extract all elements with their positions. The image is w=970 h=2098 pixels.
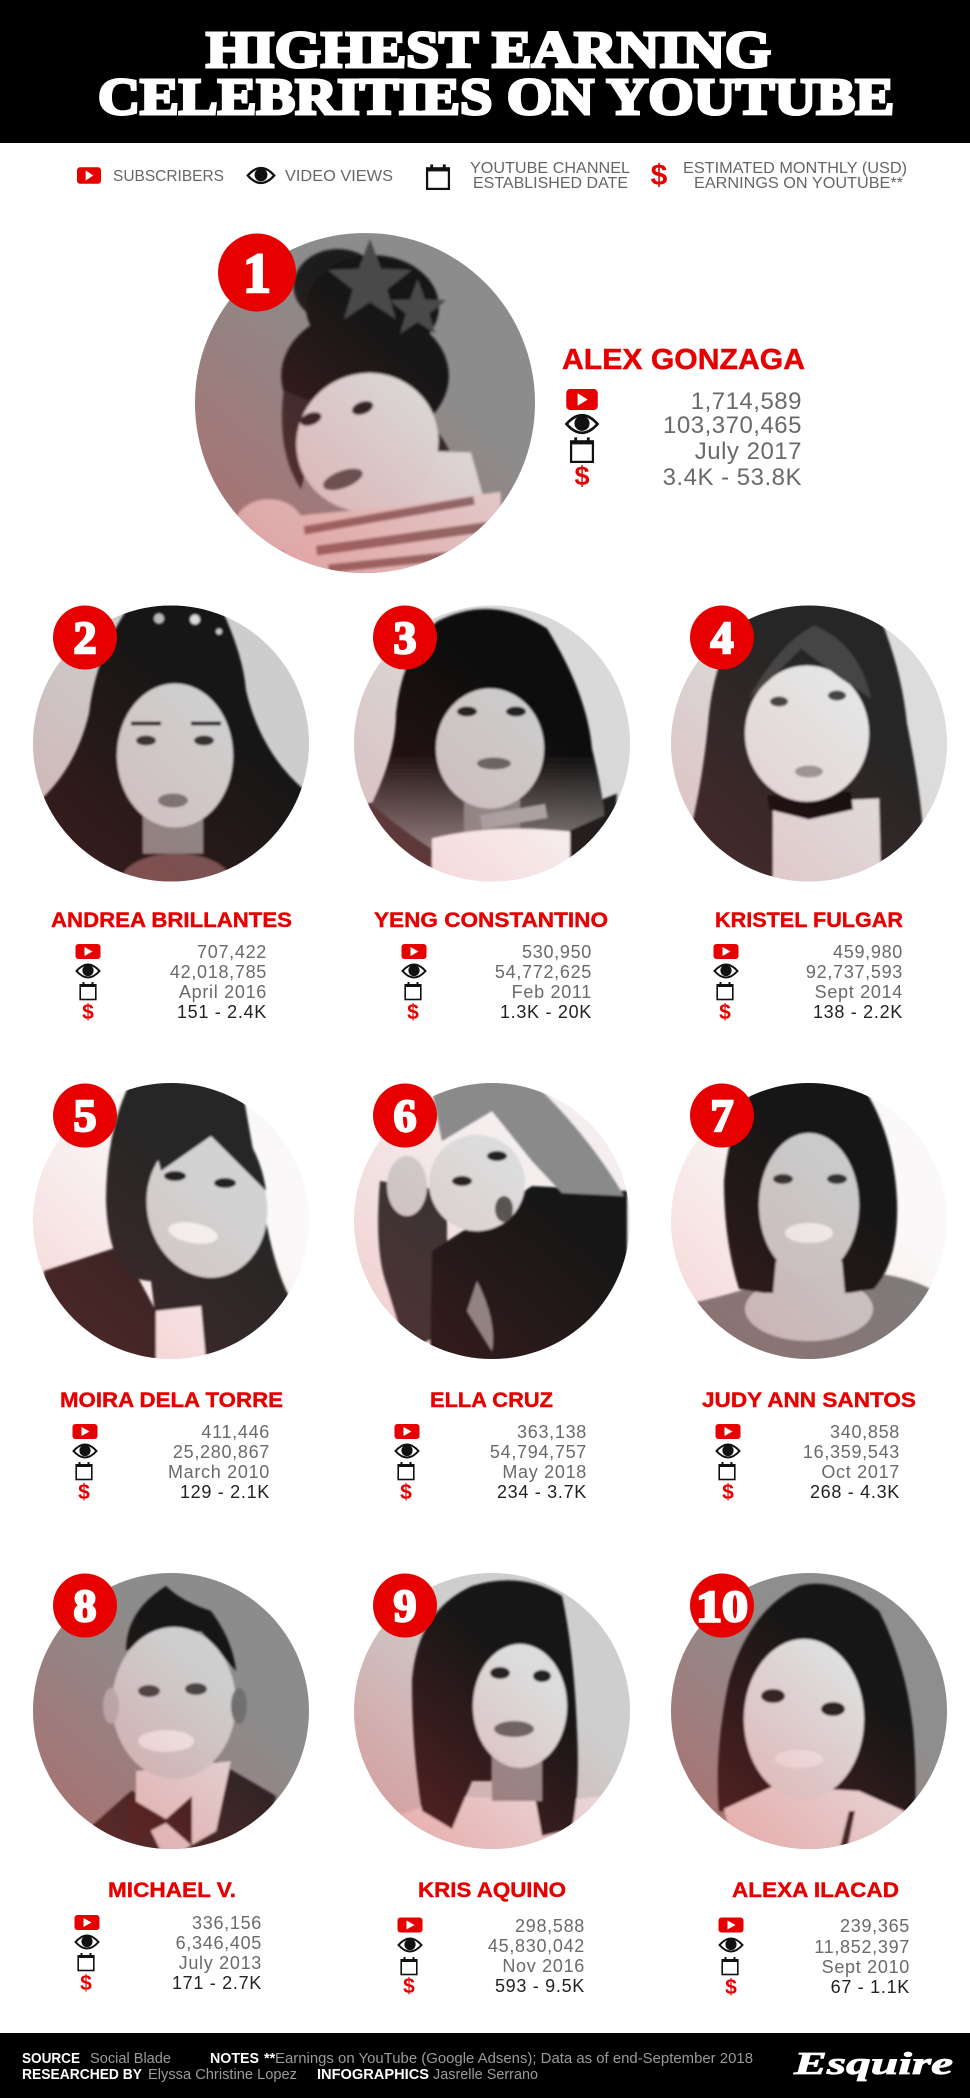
- footer credits: INFOGRAPHICS: [317, 2067, 429, 2083]
- values: 459,980: [833, 942, 903, 962]
- rank badge 4: 4: [710, 612, 734, 663]
- icon: subscribers: [402, 944, 426, 959]
- values: [803, 1422, 900, 1502]
- rank badge 3: 3: [394, 612, 416, 663]
- rank badge 6: 6: [394, 1090, 416, 1141]
- name: ALEXA ILACAD: [732, 1878, 899, 1902]
- icon: subscribers: [74, 1915, 100, 1930]
- stats: [402, 942, 592, 1024]
- panel: 4 Kristel Fulgar: [669, 604, 949, 1024]
- rank badge 7: [690, 1084, 754, 1148]
- values: 151 - 2.4K: [177, 1002, 267, 1022]
- icon: views: [566, 415, 598, 433]
- name: KRIS AQUINO: [418, 1878, 566, 1902]
- icon: earnings: $: [78, 1481, 90, 1504]
- values: Sept 2010: [822, 1957, 910, 1977]
- icon: subscribers: [714, 944, 738, 959]
- icon: date: [404, 982, 422, 1000]
- icon: earnings: $: [725, 1976, 737, 1999]
- stats: [718, 1916, 910, 1999]
- icon: views: [402, 964, 426, 978]
- panel: 7 Judy Ann Santos: [669, 1081, 949, 1504]
- icon: subscribers: [76, 944, 100, 959]
- portrait: Judy Ann Santos: [669, 1081, 949, 1361]
- values: 92,737,593: [806, 962, 903, 982]
- title line 2: CELEBRITIES ON YOUTUBE: [98, 69, 894, 126]
- values: Sept 2014: [815, 982, 903, 1002]
- Esquire logo: Esquire: [792, 2045, 953, 2081]
- panel: 6 Ella Cruz: [352, 1081, 632, 1504]
- values: Nov 2016: [502, 1956, 585, 1976]
- icon: views: [396, 1444, 418, 1458]
- values: 54,772,625: [495, 962, 592, 982]
- rank badge 3: [373, 606, 437, 670]
- values: April 2016: [179, 982, 267, 1002]
- portrait: Ella Cruz: [352, 1081, 632, 1361]
- values: 45,830,042: [488, 1936, 585, 1956]
- values: [814, 1916, 910, 1997]
- values: [168, 1422, 270, 1502]
- name: YENG CONSTANTINO: [374, 908, 608, 932]
- name: JUDY ANN SANTOS: [702, 1388, 916, 1412]
- portrait: Alexa Ilacad: [669, 1571, 949, 1851]
- values: 25,280,867: [173, 1442, 270, 1462]
- rank badge 7: 7: [710, 1090, 734, 1141]
- footer credits: Earnings on YouTube (Google Adsens); Data as of end-September 2018: [275, 2051, 753, 2067]
- rank badge 2: [53, 606, 117, 670]
- values: 171 - 2.7K: [172, 1973, 262, 1993]
- icon: date: [78, 1953, 94, 1970]
- icon: date: [718, 1462, 736, 1480]
- values: [490, 1422, 587, 1502]
- values: 707,422: [197, 942, 267, 962]
- portrait: Michael V.: [31, 1571, 311, 1851]
- rank badge 9: 9: [394, 1580, 416, 1631]
- panel: 3 Yeng Constantino: [352, 604, 632, 1024]
- rank badge 5: [53, 1084, 117, 1148]
- values: [663, 388, 802, 491]
- values: [488, 1916, 585, 1996]
- values: 234 - 3.7K: [497, 1482, 587, 1502]
- footer credits: NOTES: [210, 2051, 259, 2067]
- portrait: Moira Dela Torre: [31, 1081, 311, 1361]
- portrait: Yeng Constantino: [352, 604, 632, 884]
- values: 340,858: [830, 1422, 900, 1442]
- values: [806, 942, 903, 1022]
- legend label: channel date: ESTABLISHED DATE: [473, 175, 628, 192]
- rank badge 1: [218, 234, 296, 312]
- icon: views: [76, 1936, 98, 1948]
- icon: date: [80, 982, 96, 1000]
- values: 11,852,397: [814, 1937, 910, 1957]
- icon: views: [74, 1444, 96, 1458]
- stats: [74, 1913, 262, 1995]
- title line 1: HIGHEST EARNING: [206, 22, 771, 79]
- header banner with title: [0, 0, 970, 143]
- values: July 2017: [695, 438, 802, 465]
- portrait: Alex Gonzaga: [193, 231, 537, 575]
- icon: views: [76, 964, 100, 978]
- values: 6,346,405: [176, 1933, 262, 1953]
- portrait: Andrea Brillantes: [33, 606, 309, 882]
- values: 363,138: [517, 1422, 587, 1442]
- icon: earnings: $: [80, 1972, 92, 1995]
- footer credits: Social Blade: [90, 2051, 171, 2067]
- icon: subscribers: [398, 1918, 422, 1932]
- icon: date: [398, 1462, 414, 1480]
- icon: earnings: $: [407, 1001, 419, 1024]
- rank badge 2: 2: [74, 612, 96, 663]
- icon: video views: [248, 168, 274, 183]
- values: [170, 942, 267, 1022]
- values: 336,156: [192, 1913, 262, 1933]
- values: 268 - 4.3K: [810, 1482, 900, 1502]
- stats: [72, 1422, 270, 1504]
- values: 54,794,757: [490, 1442, 587, 1462]
- icon: subscribers: [394, 1424, 420, 1439]
- icon: earnings: $: [400, 1481, 412, 1504]
- icon: date: [76, 1462, 92, 1480]
- rank badge 1: 1: [243, 243, 271, 305]
- name: ELLA CRUZ: [430, 1388, 553, 1412]
- legend label: channel date: YOUTUBE CHANNEL: [470, 160, 630, 177]
- icon: earnings: $: [651, 159, 668, 192]
- rank badge 10: [690, 1574, 754, 1638]
- values: 103,370,465: [663, 412, 802, 439]
- values: 67 - 1.1K: [831, 1977, 910, 1997]
- legend label: video views: VIDEO VIEWS: [285, 168, 393, 185]
- rank badge 5: 5: [74, 1090, 96, 1141]
- panel: 2 Andrea Brillantes: [31, 604, 311, 1024]
- footer credits: [22, 2051, 753, 2083]
- values: Feb 2011: [512, 982, 592, 1002]
- legend label: channel date: [470, 160, 630, 192]
- legend: [77, 159, 907, 192]
- rank badge 8: [53, 1574, 117, 1638]
- stats: [716, 1422, 900, 1504]
- panel: 10 Alexa Ilacad: [669, 1571, 949, 1999]
- panel: 9 Kris Aquino: [352, 1571, 632, 1998]
- footer: [0, 2033, 970, 2098]
- legend label: earnings: EARNINGS ON YOUTUBE**: [694, 175, 903, 192]
- icon: date: [716, 982, 734, 1000]
- icon: subscribers: [716, 1424, 740, 1439]
- panel: 5 Moira Dela Torre: [31, 1081, 311, 1504]
- values: [172, 1913, 262, 1993]
- values: 1.3K - 20K: [500, 1002, 592, 1022]
- values: 239,365: [840, 1916, 910, 1936]
- icon: earnings: $: [719, 1001, 731, 1024]
- icon: subscribers: [72, 1424, 98, 1439]
- name: MOIRA DELA TORRE: [60, 1388, 283, 1412]
- icon: earnings: $: [574, 461, 590, 491]
- footer credits: Elyssa Christine Lopez: [148, 2067, 297, 2083]
- values: 138 - 2.2K: [813, 1002, 903, 1022]
- icon: earnings: $: [722, 1481, 734, 1504]
- legend label: earnings: [683, 160, 907, 192]
- icon: subscribers: [566, 389, 598, 410]
- values: May 2018: [502, 1462, 587, 1482]
- values: 411,446: [201, 1422, 270, 1442]
- footer credits: SOURCE: [22, 2051, 80, 2067]
- values: 593 - 9.5K: [495, 1976, 585, 1996]
- rank badge 8: 8: [74, 1580, 96, 1631]
- icon: subscribers: [77, 167, 101, 184]
- icon: views: [398, 1938, 422, 1952]
- name: ANDREA BRILLANTES: [51, 908, 292, 932]
- values: [495, 942, 592, 1022]
- footer credits: **: [264, 2051, 276, 2067]
- icon: views: [716, 1444, 740, 1458]
- portrait: Kristel Fulgar: [669, 604, 949, 884]
- icon: earnings: $: [82, 1001, 94, 1024]
- rank badge 6: [373, 1084, 437, 1148]
- icon: date: [722, 1957, 738, 1974]
- values: 530,950: [522, 942, 592, 962]
- name: ALEX GONZAGA: [562, 344, 805, 376]
- icon: earnings: $: [403, 1975, 415, 1998]
- values: 1,714,589: [691, 388, 802, 415]
- values: 16,359,543: [803, 1442, 900, 1462]
- footer credits: RESEARCHED BY: [22, 2067, 142, 2083]
- rank badge 9: [373, 1574, 437, 1638]
- name: KRISTEL FULGAR: [715, 908, 903, 932]
- legend label: subscribers: SUBSCRIBERS: [113, 168, 224, 185]
- values: 3.4K - 53.8K: [663, 464, 802, 491]
- rank badge 4: [690, 606, 754, 670]
- stats: [76, 942, 267, 1024]
- panel: 8 Michael V.: [31, 1571, 311, 1995]
- icon: views: [714, 964, 738, 978]
- values: Oct 2017: [821, 1462, 900, 1482]
- icon: date: [400, 1957, 418, 1974]
- rank badge 10: 10: [696, 1582, 748, 1631]
- icon: date: [570, 437, 594, 462]
- values: 42,018,785: [170, 962, 267, 982]
- values: 298,588: [515, 1916, 585, 1936]
- stats: [398, 1916, 585, 1998]
- icon: views: [720, 1938, 742, 1952]
- name: MICHAEL V.: [108, 1878, 236, 1902]
- values: March 2010: [168, 1462, 270, 1482]
- panel: 1 Alex Gonzaga: [193, 231, 805, 575]
- legend label: earnings: ESTIMATED MONTHLY (USD): [683, 160, 907, 177]
- icon: subscribers: [718, 1918, 744, 1932]
- stats: [714, 942, 903, 1024]
- values: 129 - 2.1K: [180, 1482, 270, 1502]
- values: July 2013: [179, 1953, 262, 1973]
- stats: [394, 1422, 587, 1504]
- icon: channel date: [426, 164, 450, 189]
- footer credits: Jasrelle Serrano: [433, 2067, 538, 2083]
- stats: [566, 388, 802, 491]
- portrait: Kris Aquino: [352, 1571, 632, 1851]
